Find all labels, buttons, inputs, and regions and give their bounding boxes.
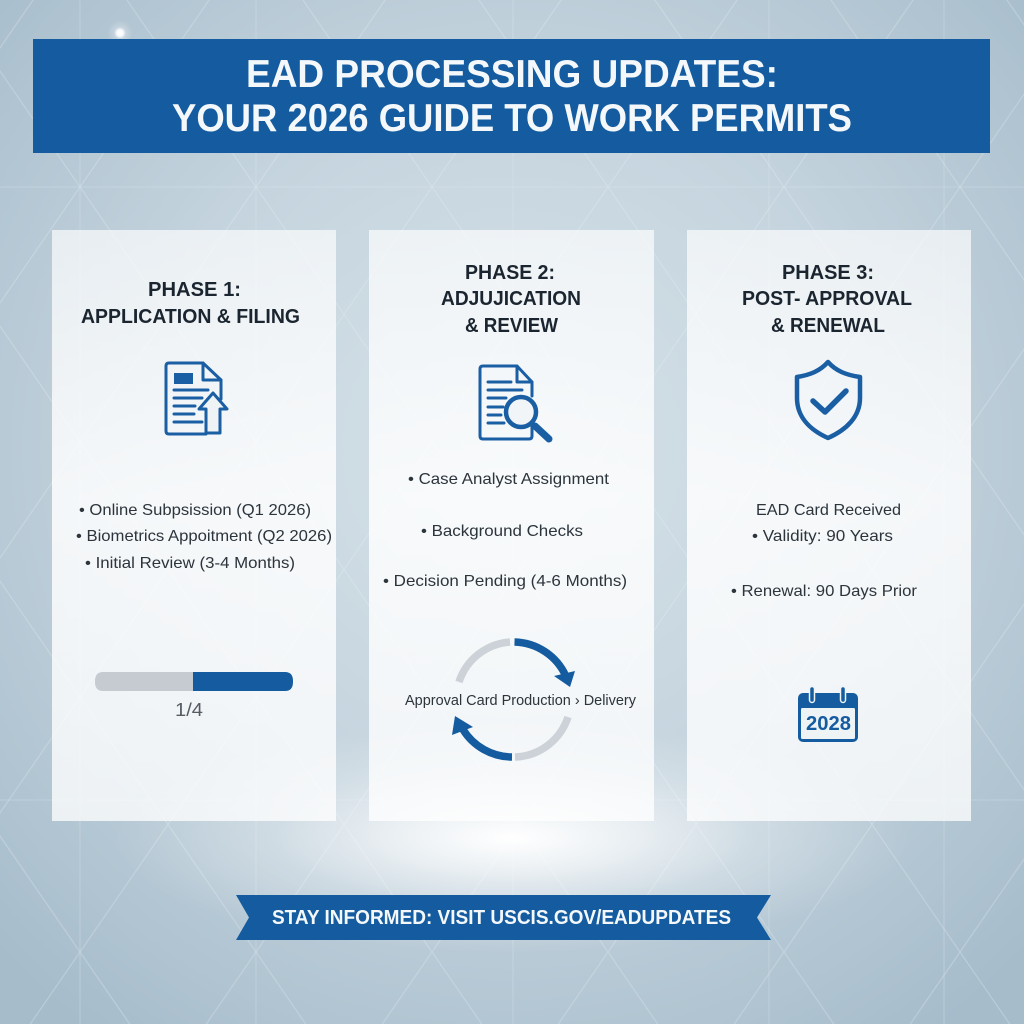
- bullet list: phase 2: • Background Checks: [421, 523, 583, 540]
- icon: calendar 2028: [798, 689, 858, 742]
- heading: phase 3: PHASE 3:: [782, 262, 874, 284]
- calendar year: 2028: [806, 713, 851, 735]
- heading: phase 1: APPLICATION & FILING: [81, 306, 300, 328]
- bullet list: phase 2: [383, 471, 627, 590]
- panel: phase 1: [52, 230, 336, 821]
- heading: phase 1: PHASE 1:: [148, 279, 241, 301]
- heading: phase 3: [742, 262, 912, 337]
- heading: phase 3: & RENEWAL: [771, 315, 885, 337]
- icon: document with upload arrow: [166, 363, 227, 434]
- panel: phase 2: [369, 230, 654, 821]
- title text: YOUR 2026 GUIDE TO WORK PERMITS: [172, 97, 852, 140]
- bullet list: phase 3: • Validity: 90 Years: [752, 528, 893, 545]
- bullet list: phase 2: • Decision Pending (4-6 Months): [383, 573, 627, 590]
- bullet list: phase 1: • Biometrics Appoitment (Q2 2026): [76, 528, 332, 545]
- bullet list: phase 1: • Online Subpsission (Q1 2026): [79, 502, 311, 519]
- icon: shield with check: [797, 362, 860, 438]
- panel: phase 3: [687, 230, 971, 821]
- cycle diagram: [405, 642, 637, 757]
- bullet list: phase 1: • Initial Review (3-4 Months): [85, 555, 295, 572]
- heading: phase 2: & REVIEW: [465, 315, 558, 337]
- footer ribbon: [236, 895, 771, 940]
- title text: [172, 53, 852, 140]
- bullet list: phase 3: [731, 502, 918, 600]
- title text: EAD PROCESSING UPDATES:: [246, 53, 778, 96]
- heading: phase 3: POST- APPROVAL: [742, 288, 912, 310]
- heading: phase 1: [81, 279, 300, 328]
- bullet list: phase 1: [76, 502, 332, 572]
- bullet list: phase 3: EAD Card Received: [756, 502, 901, 519]
- cycle label: Approval Card Production › Delivery: [405, 693, 637, 709]
- bullet list: phase 2: • Case Analyst Assignment: [408, 471, 610, 488]
- heading: phase 2: [441, 262, 581, 337]
- icon: document with magnifier: [480, 366, 549, 439]
- heading: phase 2: PHASE 2:: [465, 262, 555, 284]
- footer text: STAY INFORMED: VISIT USCIS.GOV/EADUPDATES: [272, 907, 731, 929]
- heading: phase 2: ADJUJICATION: [441, 288, 581, 310]
- bullet list: phase 3: • Renewal: 90 Days Prior: [731, 583, 918, 600]
- progress label: 1/4: [175, 700, 203, 720]
- title banner: [33, 39, 990, 153]
- progress bar: [95, 672, 293, 720]
